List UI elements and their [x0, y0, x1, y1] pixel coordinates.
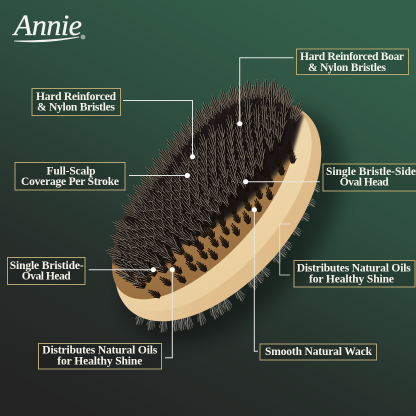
callout: Single Bristle-Side Oval Head: [243, 164, 416, 191]
marker dot: [190, 154, 195, 159]
label box: Hard Reinforced Boar: [300, 51, 404, 63]
brush illustration: [76, 66, 387, 385]
label box: for Healthy Shine: [57, 355, 142, 367]
leader line: [280, 224, 290, 275]
bristle bed: [81, 74, 326, 329]
label box: Full-Scalp: [46, 166, 96, 178]
dark bristle mass: [113, 89, 302, 272]
bristle tufts: [89, 69, 330, 321]
label box: [323, 164, 416, 191]
label box: Oval Head: [340, 177, 389, 189]
label box: Coverage Per Stroke: [21, 176, 119, 188]
brush shadow: [77, 67, 387, 385]
underside bristle fringe: [134, 181, 322, 333]
label box: Smooth Natural Wack: [265, 346, 373, 358]
marker dot: [151, 267, 156, 272]
leader line: [165, 270, 172, 358]
marker dot: [243, 179, 248, 184]
leader line: [254, 210, 258, 351]
label box: & Nylon Bristles: [308, 62, 387, 74]
label box: [294, 260, 415, 287]
label box: [260, 344, 376, 360]
logo: Annie: Annie: [12, 9, 82, 42]
callout: Single Bristide-Oval Head: [8, 258, 156, 284]
label box: Distributes Natural Oils: [42, 345, 158, 357]
label box: Distributes Natural Oils: [297, 263, 411, 275]
label box: [15, 162, 125, 190]
leader line: [246, 181, 320, 183]
callout: Distributes Natural Oils, right: [280, 224, 415, 287]
label box: Single Bristle-Side: [326, 166, 416, 178]
callout: Full-Scalp Coverage Per Stroke: [15, 162, 190, 190]
leader line: [240, 58, 294, 123]
marker dot: [237, 121, 242, 126]
callout: Hard Reinforced & Nylon Bristles: [32, 88, 195, 159]
wood top rim: [82, 70, 346, 344]
leader line: [123, 100, 192, 156]
label box: Single Bristide-: [10, 260, 84, 272]
wooden oval base: [76, 66, 360, 358]
label box: [296, 49, 408, 74]
label box: [38, 344, 162, 369]
label box: Hard Reinforced: [36, 91, 117, 103]
label box: Oval Head: [22, 271, 71, 283]
label box: [32, 88, 120, 116]
label box: & Nylon Bristles: [37, 102, 116, 114]
label box: [8, 258, 85, 284]
callout: Hard Reinforced Boar & Nylon Bristles: [237, 49, 408, 126]
marker dot: [185, 173, 190, 178]
leader line: [89, 269, 153, 271]
marker dot: [252, 207, 257, 212]
label box: for Healthy Shine: [309, 274, 394, 286]
callout: Smooth Natural Wack: [252, 207, 376, 360]
leader line: [129, 174, 187, 176]
callout: Distributes Natural Oils, lower left: [38, 267, 175, 369]
bristle edge tufts: [103, 78, 307, 264]
marker dot: [170, 267, 175, 272]
